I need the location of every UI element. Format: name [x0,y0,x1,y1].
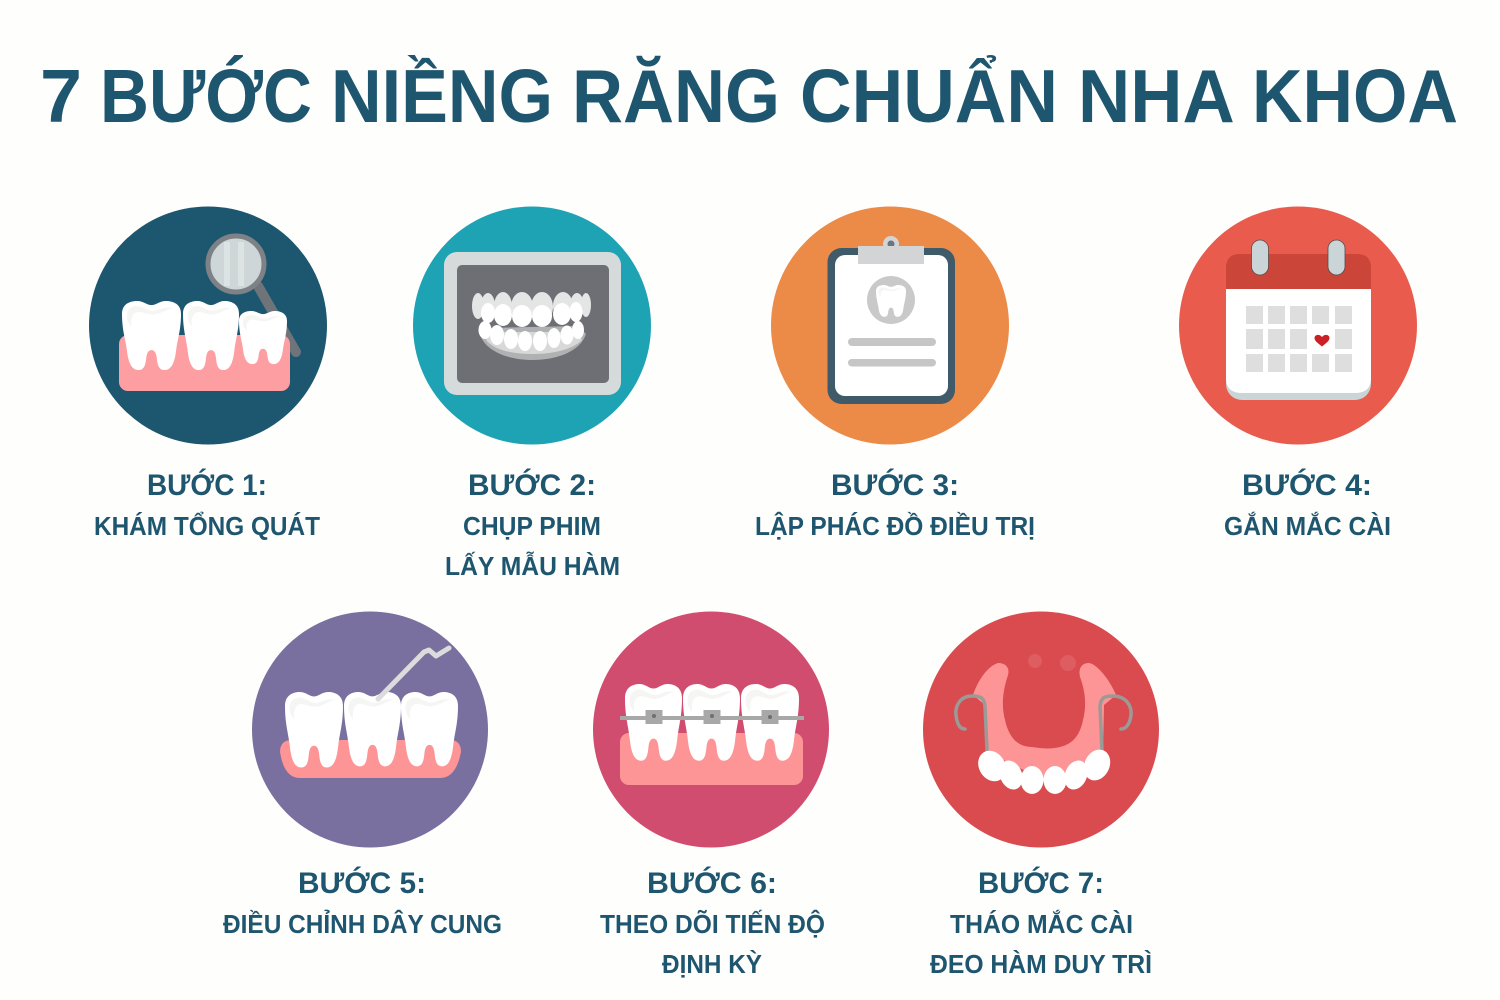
step 3 heading: BƯỚC 3: [831,468,959,502]
step 7 heading: BƯỚC 7: [978,866,1104,900]
icon: teeth with braces [593,612,829,848]
step 1: general examination [89,206,327,541]
step 7 description line 2: ĐEO HÀM DUY TRÌ [930,950,1152,979]
step 4 description: GẮN MẮC CÀI [1224,511,1391,541]
step 7: remove brackets, wear retainer [923,612,1159,979]
title: NHA [1078,54,1234,138]
icon: teeth and dental mirror [89,206,327,444]
step 6 heading: BƯỚC 6: [647,866,777,900]
step 2: x-ray and impressions [413,206,651,581]
icon: dental x-ray [413,206,651,444]
step 3 description: LẬP PHÁC ĐỒ ĐIỀU TRỊ [755,511,1035,541]
step 5 description: ĐIỀU CHỈNH DÂY CUNG [223,909,502,939]
step 2 description line 2: LẤY MẪU HÀM [445,551,620,581]
icon: calendar with heart [1179,206,1417,444]
step 5 heading: BƯỚC 5: [298,866,426,900]
icon: clipboard with tooth [771,206,1009,444]
step 7 description line 1: THÁO MẮC CÀI [950,909,1133,939]
title: CHUẨN [800,54,1058,138]
title: RĂNG [572,54,780,138]
step 2 heading: BƯỚC 2: [468,468,596,502]
step 6 description line 1: THEO DÕI TIẾN ĐỘ [600,909,825,939]
step 5: adjust archwire [223,612,502,939]
step 6: periodic monitoring [593,612,829,979]
title: KHOA [1252,54,1458,138]
title: 7 [40,54,82,138]
step 3: treatment plan [755,206,1035,541]
icon: teeth with dental probe [252,612,488,848]
step 6 description line 2: ĐỊNH KỲ [662,949,762,979]
step 4 heading: BƯỚC 4: [1242,468,1372,502]
step 4: attach brackets [1179,206,1417,541]
step 1 description: KHÁM TỔNG QUÁT [94,511,320,541]
step 2 description line 1: CHỤP PHIM [463,513,601,541]
icon: dental retainer [923,612,1159,848]
title: NIỀNG [331,54,553,138]
step 1 heading: BƯỚC 1: [147,468,267,502]
title: BƯỚC [100,54,312,138]
